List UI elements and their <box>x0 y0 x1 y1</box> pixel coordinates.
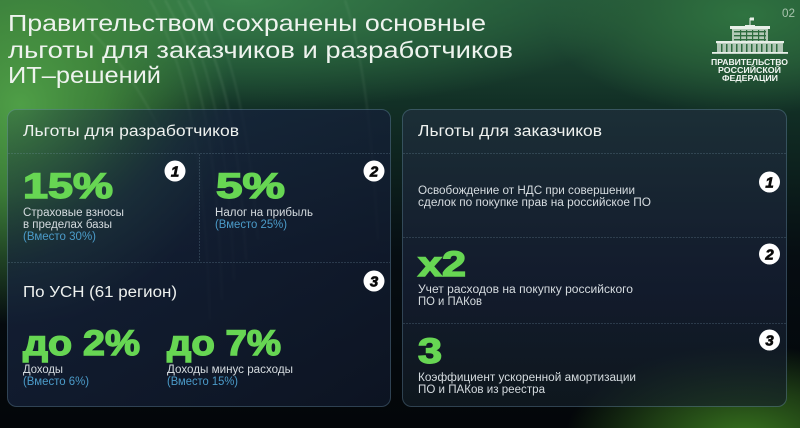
panel heading: developers: Льготы для разработчиков <box>23 123 239 140</box>
row 1: VAT exemption <box>418 185 651 209</box>
badge 2 <box>364 160 384 182</box>
stat: income minus expenses rate <box>167 324 293 388</box>
badge 2: 2 <box>764 246 774 264</box>
row 2: double expenses: ПО и ПАКов <box>418 296 482 308</box>
badge 3 <box>759 330 780 350</box>
row 2: double expenses: Учет расходов на покупку российского <box>418 284 633 296</box>
badge 3: 3 <box>765 332 774 350</box>
row 3: accelerated depreciation: 3 <box>418 332 442 371</box>
badge 2 <box>759 244 780 264</box>
badge 2: 2 <box>369 164 379 180</box>
cell 2: profit tax: (Вместо 25%) <box>215 219 287 231</box>
stat: income rate: (Вместо 6%) <box>23 376 89 388</box>
cell 2: profit tax: Налог на прибыль <box>215 207 313 219</box>
cell 3 heading: simplified tax: По УСН (61 регион) <box>23 284 177 301</box>
title: льготы для заказчиков и разработчиков <box>8 37 513 63</box>
logo text: ПРАВИТЕЛЬСТВО <box>711 58 788 67</box>
row 2: double expenses <box>418 245 633 308</box>
title: Правительством сохранены основные <box>8 10 486 36</box>
logo text <box>711 58 788 83</box>
cell 2: profit tax <box>215 167 313 231</box>
title <box>8 10 513 88</box>
row 3: accelerated depreciation <box>418 332 636 396</box>
cell 1: insurance contributions: Страховые взносы <box>23 207 124 219</box>
badge 1 <box>759 172 780 192</box>
stat: income minus expenses rate: (Вместо 15%) <box>167 376 238 388</box>
row 3: accelerated depreciation: Коэффициент ускоренной амортизации <box>418 372 636 384</box>
cell 2: profit tax: 5% <box>216 167 285 206</box>
badge 1: 1 <box>765 174 774 192</box>
badge 1: 1 <box>171 164 179 180</box>
logo text: РОССИЙСКОЙ <box>718 66 781 75</box>
icon: government building <box>712 18 788 54</box>
stat: income rate: до 2% <box>23 324 140 363</box>
row 1: VAT exemption: сделок по покупке прав на российское ПО <box>418 197 651 209</box>
stat: income rate: Доходы <box>23 364 63 376</box>
panel: benefits for customers <box>402 110 786 406</box>
stat: income rate <box>23 324 140 388</box>
row 2: double expenses: х2 <box>418 245 466 284</box>
panel heading: customers: Льготы для заказчиков <box>418 123 602 140</box>
cell 1: insurance contributions <box>23 167 124 243</box>
row 1: VAT exemption: Освобождение от НДС при совершении <box>418 185 635 197</box>
badge 3 <box>364 270 384 292</box>
logo text: ФЕДЕРАЦИИ <box>722 74 778 83</box>
badge 1 <box>164 160 186 182</box>
logo: government of Russia <box>711 18 788 83</box>
page number: 02 <box>782 8 795 20</box>
panel: benefits for developers <box>8 110 390 406</box>
stat: income minus expenses rate: Доходы минус расходы <box>167 364 293 376</box>
cell 1: insurance contributions: в пределах базы <box>23 219 112 231</box>
cell 1: insurance contributions: (Вместо 30%) <box>23 231 96 243</box>
row 3: accelerated depreciation: ПО и ПАКов из реестра <box>418 384 546 396</box>
cell 1: insurance contributions: 15% <box>23 167 113 206</box>
badge 3: 3 <box>370 274 379 290</box>
stat: income minus expenses rate: до 7% <box>167 324 281 363</box>
title: ИТ–решений <box>8 62 161 88</box>
